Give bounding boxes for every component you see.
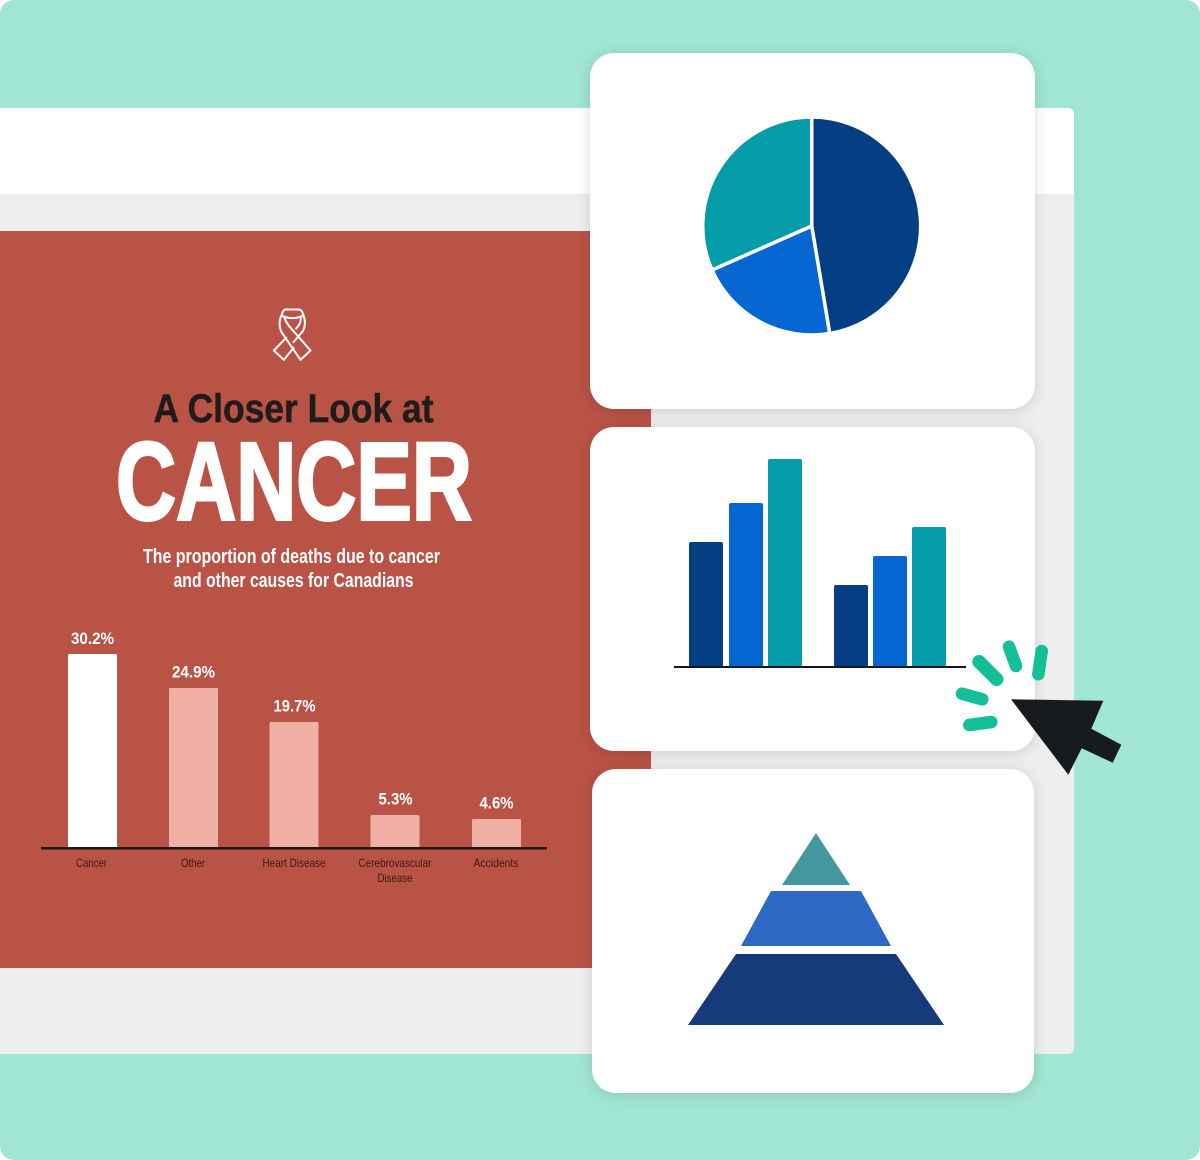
- card: pyramid: [592, 769, 1034, 1093]
- subtitle: The proportion of deaths due to cancer: [143, 546, 440, 568]
- red page background: [0, 231, 651, 968]
- pyramid diagram: [688, 833, 944, 1025]
- bar: Other: 24.9%: [172, 662, 215, 682]
- category labels: Accidents: [474, 856, 518, 870]
- pie chart: [703, 117, 921, 335]
- subtitle: and other causes for Canadians: [174, 570, 414, 592]
- subtitle: [143, 546, 440, 592]
- card: pie chart: [590, 53, 1035, 409]
- bar: Cerebrovascular Disease: 5.3%: [378, 790, 412, 808]
- category labels: [76, 856, 518, 885]
- bar: Cerebrovascular Disease: [370, 790, 420, 848]
- icon: click sparks: [962, 647, 1042, 725]
- bar: Heart Disease: [270, 696, 318, 848]
- bar: Accidents: 4.6%: [480, 794, 514, 812]
- bar: Accidents: [472, 794, 521, 848]
- axis line: [41, 847, 547, 850]
- bar chart: causes of death: [41, 629, 547, 885]
- infographic page: [0, 231, 651, 968]
- icon: awareness ribbon: [274, 309, 310, 360]
- bar: Cancer: 30.2%: [71, 629, 114, 648]
- bar: Other: [169, 662, 218, 848]
- category labels: Disease: [378, 871, 413, 885]
- title: A Closer Look at: [154, 387, 434, 431]
- title: CANCER: [116, 420, 472, 544]
- editor window: [0, 108, 1074, 1054]
- bar: Cancer: [68, 629, 117, 848]
- category labels: Cerebrovascular: [358, 856, 432, 870]
- category labels: Other: [181, 856, 205, 870]
- grouped bars: [674, 459, 966, 668]
- category labels: Cancer: [76, 856, 107, 870]
- title: [116, 387, 472, 544]
- icon: cursor arrow: [1011, 699, 1121, 775]
- card: bar chart: [590, 427, 1035, 751]
- bar: Heart Disease: 19.7%: [274, 696, 316, 716]
- category labels: Heart Disease: [262, 856, 326, 870]
